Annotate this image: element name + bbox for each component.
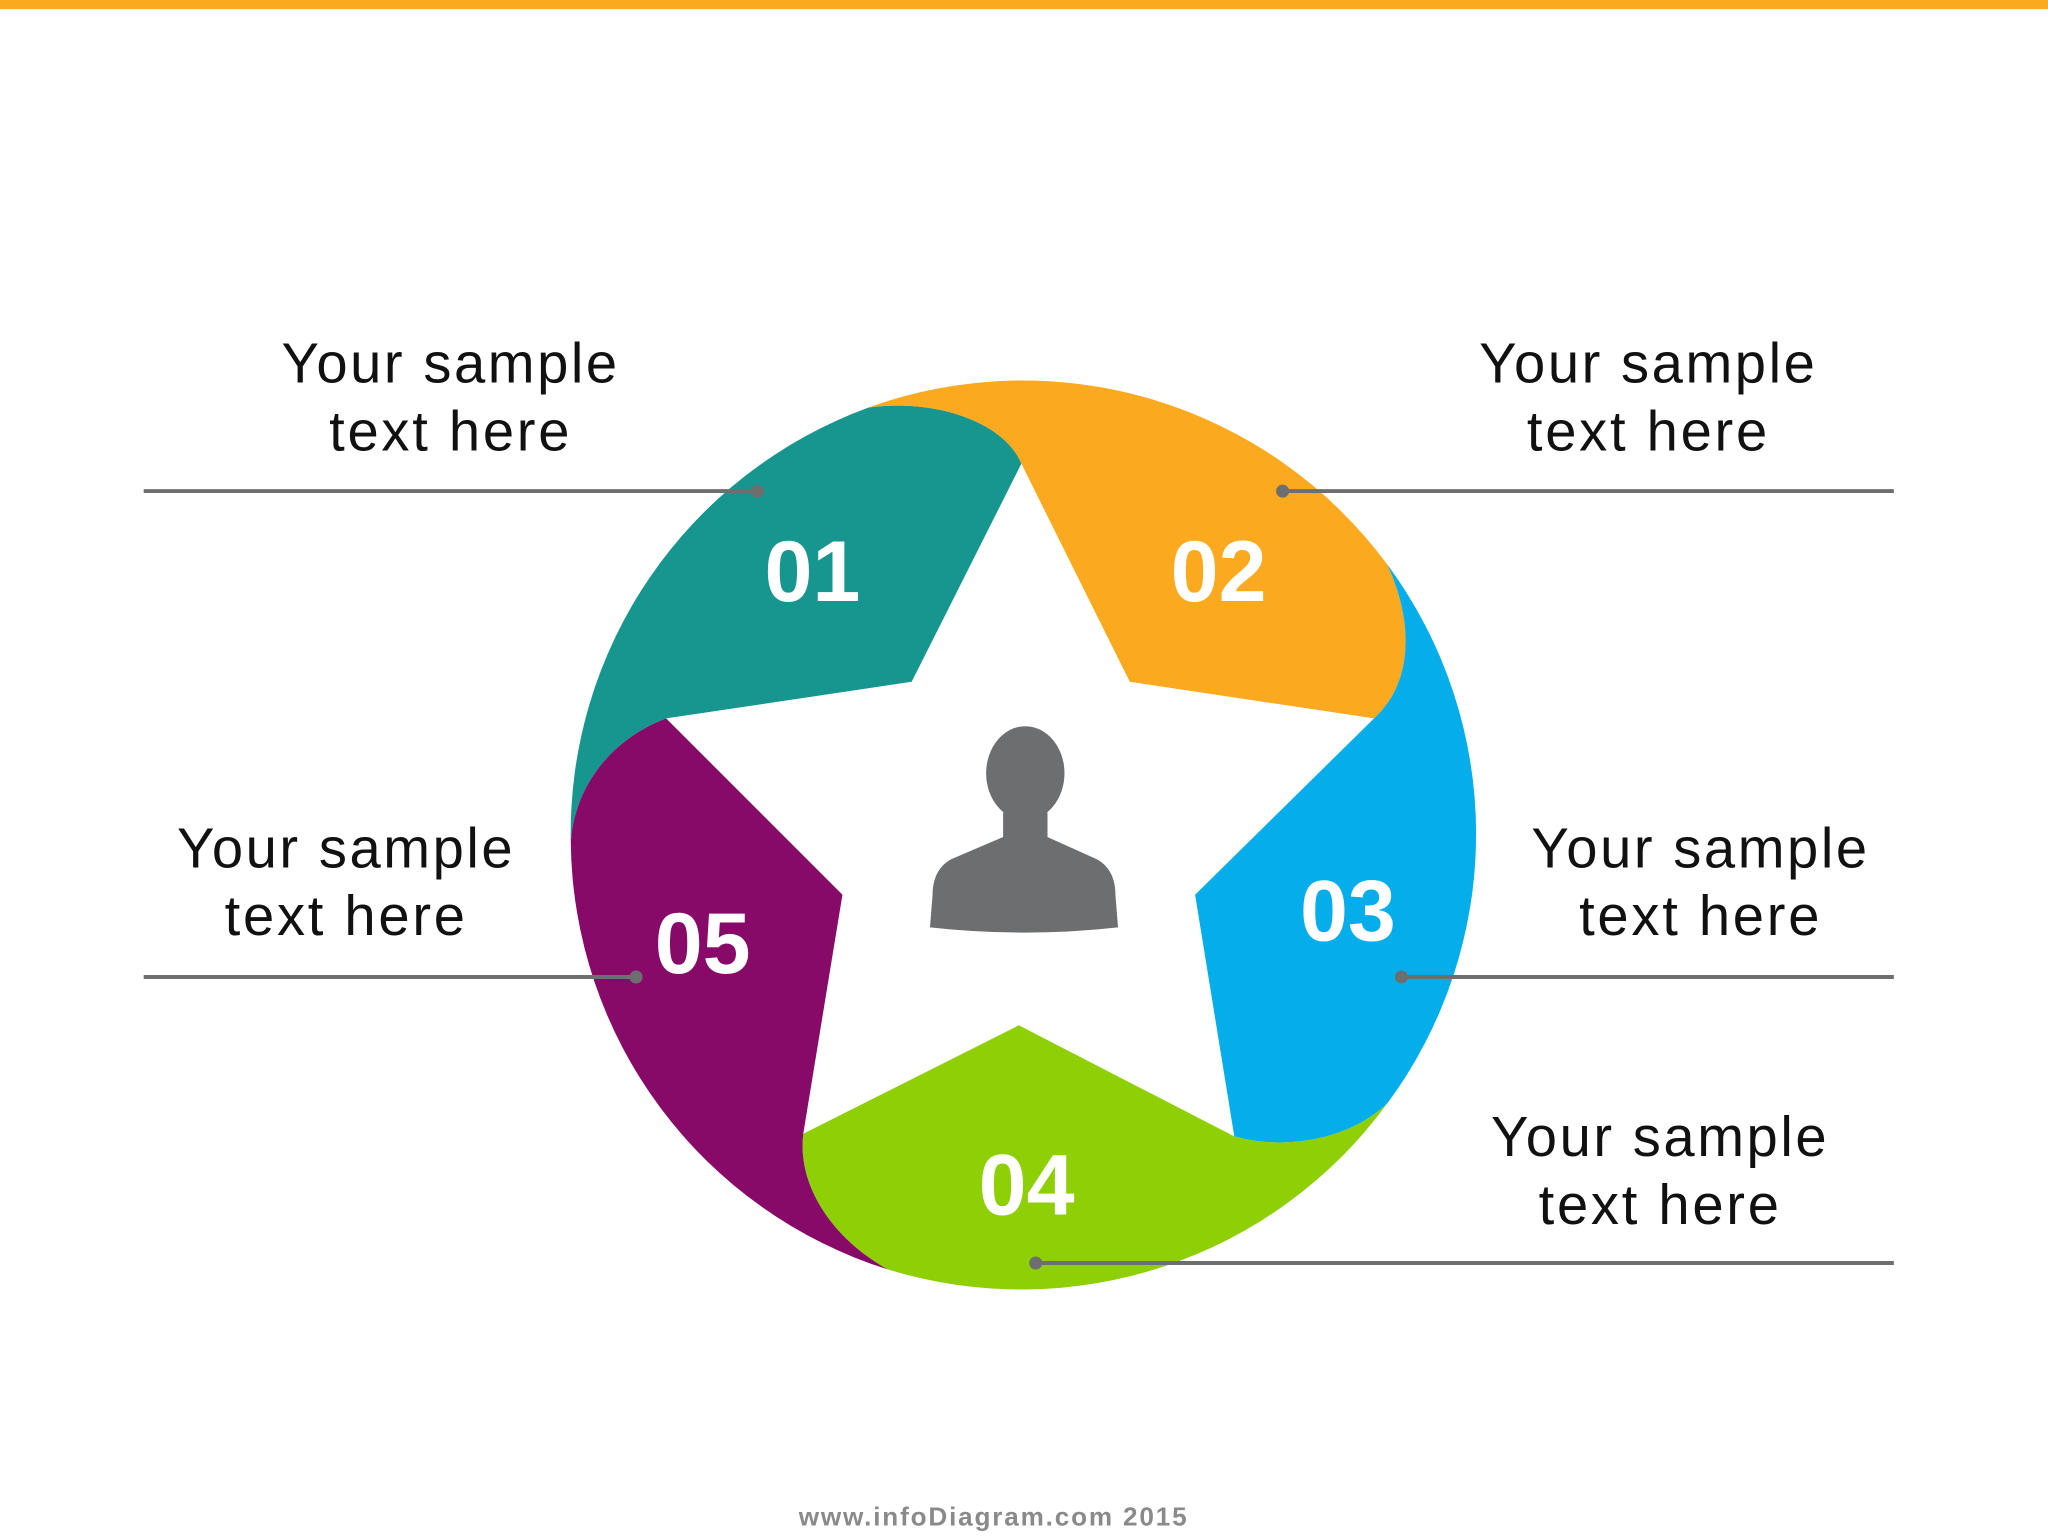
- number 05: 05: [655, 896, 751, 992]
- footer: www.infoDiagram.com 2015: [798, 1502, 1187, 1532]
- text block 05: Your sample: [177, 816, 513, 879]
- text block 03: Your sample: [1531, 816, 1867, 879]
- text block 01: text here: [329, 400, 569, 463]
- number 04: 04: [979, 1138, 1075, 1234]
- segment 03 blue: [1195, 564, 1476, 1142]
- segment 04 green: [803, 1025, 1387, 1290]
- connector lines: [144, 485, 1894, 1270]
- icon: person: [930, 726, 1118, 933]
- number 01: 01: [764, 524, 860, 620]
- text block 04: text here: [1539, 1173, 1779, 1236]
- text block 01: Your sample: [281, 332, 617, 395]
- text block 03: text here: [1579, 884, 1819, 947]
- number 02: 02: [1171, 524, 1267, 620]
- text block 02: text here: [1527, 400, 1767, 463]
- segment 05 purple: [571, 718, 888, 1270]
- text block 02: Your sample: [1479, 332, 1815, 395]
- segment 01 teal: [571, 406, 1021, 842]
- top bar: [0, 0, 2048, 9]
- text block 04: Your sample: [1491, 1105, 1827, 1168]
- star circle diagram: [571, 380, 1476, 1290]
- number 03: 03: [1300, 863, 1396, 959]
- segment 02 orange: [869, 380, 1406, 718]
- text block 05: text here: [225, 884, 465, 947]
